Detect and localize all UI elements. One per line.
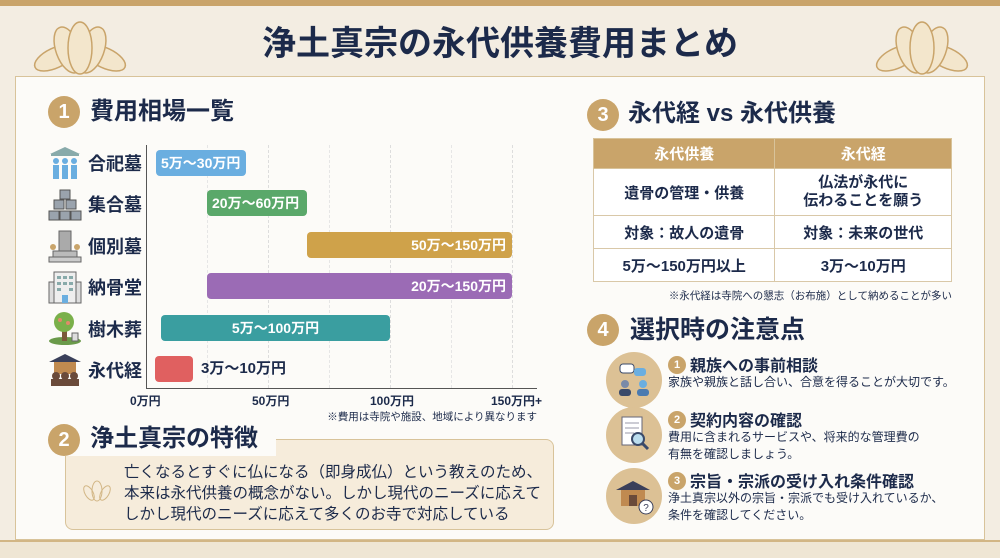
item 2: 2: [674, 414, 680, 426]
item 3: 浄土真宗以外の宗旨・宗派でも受け入れているか、: [668, 491, 943, 505]
section 4 heading: 選択時の注意点: [630, 316, 805, 344]
icon: lotus right: [876, 21, 968, 75]
section 1 heading: 費用相場一覧: [90, 98, 234, 125]
bar: 合祀墓: [156, 150, 246, 176]
comparison table: 伝わることを願う: [803, 192, 923, 209]
bar: 納骨堂: 20万～150万円: [411, 278, 506, 294]
bar chart: 50万円: [252, 394, 289, 408]
section 2 text: [124, 464, 542, 523]
section 1 number: 1: [58, 101, 70, 123]
comparison table: 永代経: [841, 146, 886, 163]
icon: lotus left: [34, 21, 126, 75]
section 2 heading: 2: [58, 429, 70, 451]
bottom band: [0, 540, 1000, 558]
item 1: 親族への事前相談: [690, 358, 818, 375]
section 4 number: 4: [597, 319, 609, 341]
item 3: 3: [674, 475, 680, 487]
icon: temple eternal sutra: [49, 354, 81, 386]
top gold band: [0, 0, 1000, 6]
bar: 個別墓: [307, 232, 512, 258]
bar chart: 個別墓: [88, 237, 142, 257]
panel: section 2 features: [65, 439, 554, 530]
bar chart: [48, 145, 542, 423]
section 1 number: [48, 96, 80, 128]
item 1: [606, 352, 955, 408]
section 2 heading: 浄土真宗の特徴: [90, 425, 258, 452]
bar chart: 150万円+: [491, 394, 542, 408]
item 1: 家族や親族と話し合い、合意を得ることが大切です。: [668, 375, 955, 389]
icon: shared grave: [48, 190, 82, 220]
comparison table: 遺骨の管理・供養: [624, 184, 744, 202]
item 3: 宗旨・宗派の受け入れ条件確認: [690, 474, 914, 491]
bar: 集合墓: 20万～60万円: [212, 195, 299, 211]
item 3: [606, 468, 943, 524]
icon: joint grave: [50, 147, 80, 179]
section 3 heading: 永代経 vs 永代供養: [628, 100, 836, 127]
bar: 樹木葬: [161, 315, 390, 341]
bar chart: 樹木葬: [88, 320, 142, 340]
item 3: 条件を確認してください。: [668, 508, 811, 522]
section 4 number: [587, 314, 619, 346]
comparison table: 3万～10万円: [821, 258, 906, 274]
bar: 合祀墓: 5万～30万円: [161, 155, 240, 171]
comparison table: [593, 138, 952, 282]
bar: 集合墓: [207, 190, 307, 216]
icon: individual grave: [48, 230, 82, 262]
table note: ※永代経は寺院への懇志（お布施）として納めることが多い: [669, 290, 952, 302]
bar chart: 100万円: [370, 394, 414, 408]
chart note: ※費用は寺院や施設、地域により異なります: [327, 411, 537, 423]
bar chart: 集合墓: [88, 195, 142, 215]
section 2 text: 亡くなるとすぐに仏になる（即身成仏）という教えのため、: [124, 464, 542, 481]
icon: small lotus: [83, 480, 111, 502]
item 2: 契約内容の確認: [690, 413, 802, 430]
item 2: 有無を確認しましょう。: [668, 447, 799, 461]
bar: 樹木葬: 5万～100万円: [232, 320, 319, 336]
section 2 text: しかし現代のニーズに応えて多くのお寺で対応している: [124, 506, 510, 523]
icon: temple question: [606, 468, 662, 524]
axis labels: 0万円: [130, 394, 161, 408]
comparison table: 5万～150万円以上: [623, 258, 746, 274]
bar: 納骨堂: [207, 273, 512, 299]
bar: 個別墓: 50万～150万円: [411, 237, 506, 253]
bar: 永代経: [155, 356, 193, 382]
bar chart: 合祀墓: [88, 154, 142, 174]
bar chart: 永代経: [88, 361, 142, 381]
section 3 number: 3: [597, 104, 609, 126]
comparison table: 仏法が永代に: [818, 174, 908, 191]
item 1: 1: [674, 359, 680, 371]
comparison table: 対象：未来の世代: [803, 224, 923, 242]
icon: temple question: ?: [643, 503, 649, 514]
comparison table: 対象：故人の遺骨: [624, 224, 744, 242]
item 2: 費用に含まれるサービスや、将来的な管理費の: [668, 430, 920, 444]
bar chart: 納骨堂: [88, 278, 142, 298]
icon: document check: [606, 407, 662, 463]
icon: ossuary building: [48, 272, 82, 304]
bar chart: 3万～10万円: [201, 360, 286, 377]
section 2 heading: [46, 422, 276, 456]
section 3 number: [587, 99, 619, 131]
icon: consultation: [606, 352, 662, 408]
comparison table: 永代供養: [654, 146, 714, 163]
title: 浄土真宗の永代供養費用まとめ: [262, 25, 738, 63]
item 2: [606, 408, 920, 463]
icon: tree burial: [49, 312, 81, 345]
section 2 text: 本来は永代供養の概念がない。しかし現代のニーズに応えて: [124, 485, 541, 502]
